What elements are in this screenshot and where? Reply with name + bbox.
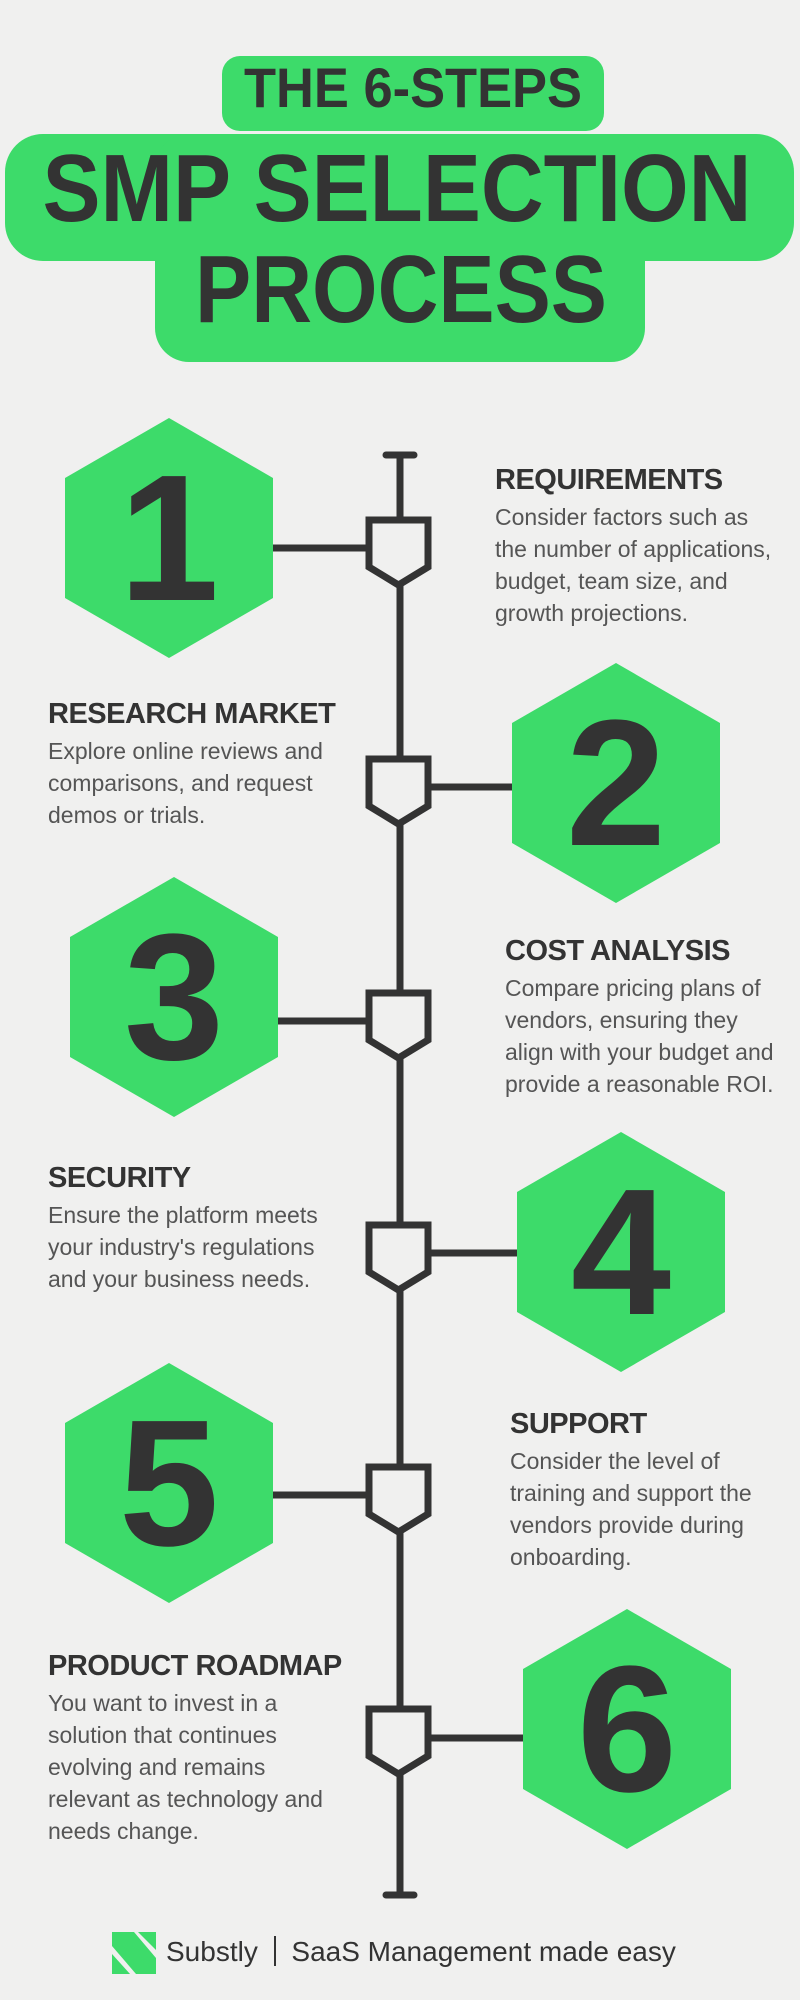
text: product roadmap: solution that continues [48, 1722, 277, 1748]
title: PROCESS [195, 236, 607, 343]
step 2 hexagon [369, 663, 720, 903]
footer [112, 1932, 676, 1974]
text: product roadmap: You want to invest in a [48, 1690, 277, 1716]
text: cost analysis: Compare pricing plans of [505, 975, 761, 1001]
text: cost analysis [505, 935, 774, 1097]
text: security: SECURITY [48, 1162, 191, 1194]
step 1 hexagon: 1 [119, 438, 219, 639]
step 3 hexagon [70, 877, 428, 1117]
text: research market [48, 698, 336, 828]
text: research market: RESEARCH MARKET [48, 698, 335, 730]
text: requirements: the number of applications, [495, 536, 771, 562]
text: security: your industry's regulations [48, 1234, 314, 1260]
text: research market: Explore online reviews and [48, 738, 323, 764]
text: product roadmap: evolving and remains [48, 1754, 265, 1780]
title: THE 6-STEPS [244, 56, 582, 119]
text: product roadmap: needs change. [48, 1818, 199, 1844]
text: research market: comparisons, and request [48, 770, 313, 796]
text: cost analysis: COST ANALYSIS [505, 935, 730, 967]
text: requirements: growth projections. [495, 600, 688, 626]
text: support: SUPPORT [510, 1408, 647, 1440]
text: security [48, 1162, 318, 1292]
text: support: Consider the level of [510, 1448, 720, 1474]
text: security: and your business needs. [48, 1266, 310, 1292]
text: security: Ensure the platform meets [48, 1202, 318, 1228]
title [5, 56, 794, 362]
text: support: onboarding. [510, 1544, 632, 1570]
text: requirements [495, 464, 771, 626]
text: requirements: Consider factors such as [495, 504, 748, 530]
step 2 hexagon: 2 [566, 683, 666, 884]
step 4 hexagon: 4 [571, 1152, 671, 1353]
text: requirements: budget, team size, and [495, 568, 728, 594]
brand text: Substly SaaS Management made easy [166, 1936, 676, 1967]
step 6 hexagon [369, 1609, 731, 1849]
step 6 hexagon: 6 [577, 1629, 677, 1830]
spine [386, 455, 414, 1895]
step 3 hexagon: 3 [124, 897, 224, 1098]
text: support [510, 1408, 752, 1570]
text: product roadmap: relevant as technology and [48, 1786, 323, 1812]
text: support: training and support the [510, 1480, 752, 1506]
step 1 hexagon [65, 418, 428, 658]
step 5 hexagon: 5 [119, 1383, 219, 1584]
icon: substly logo [112, 1932, 156, 1974]
text: requirements: REQUIREMENTS [495, 464, 723, 496]
text: research market: demos or trials. [48, 802, 205, 828]
text: support: vendors provide during [510, 1512, 744, 1538]
text: product roadmap: PRODUCT ROADMAP [48, 1650, 342, 1682]
text: product roadmap [48, 1650, 342, 1844]
step 5 hexagon [65, 1363, 428, 1603]
text: cost analysis: provide a reasonable ROI. [505, 1071, 774, 1097]
text: cost analysis: vendors, ensuring they [505, 1007, 738, 1033]
text: cost analysis: align with your budget and [505, 1039, 774, 1065]
step 4 hexagon [369, 1132, 725, 1372]
